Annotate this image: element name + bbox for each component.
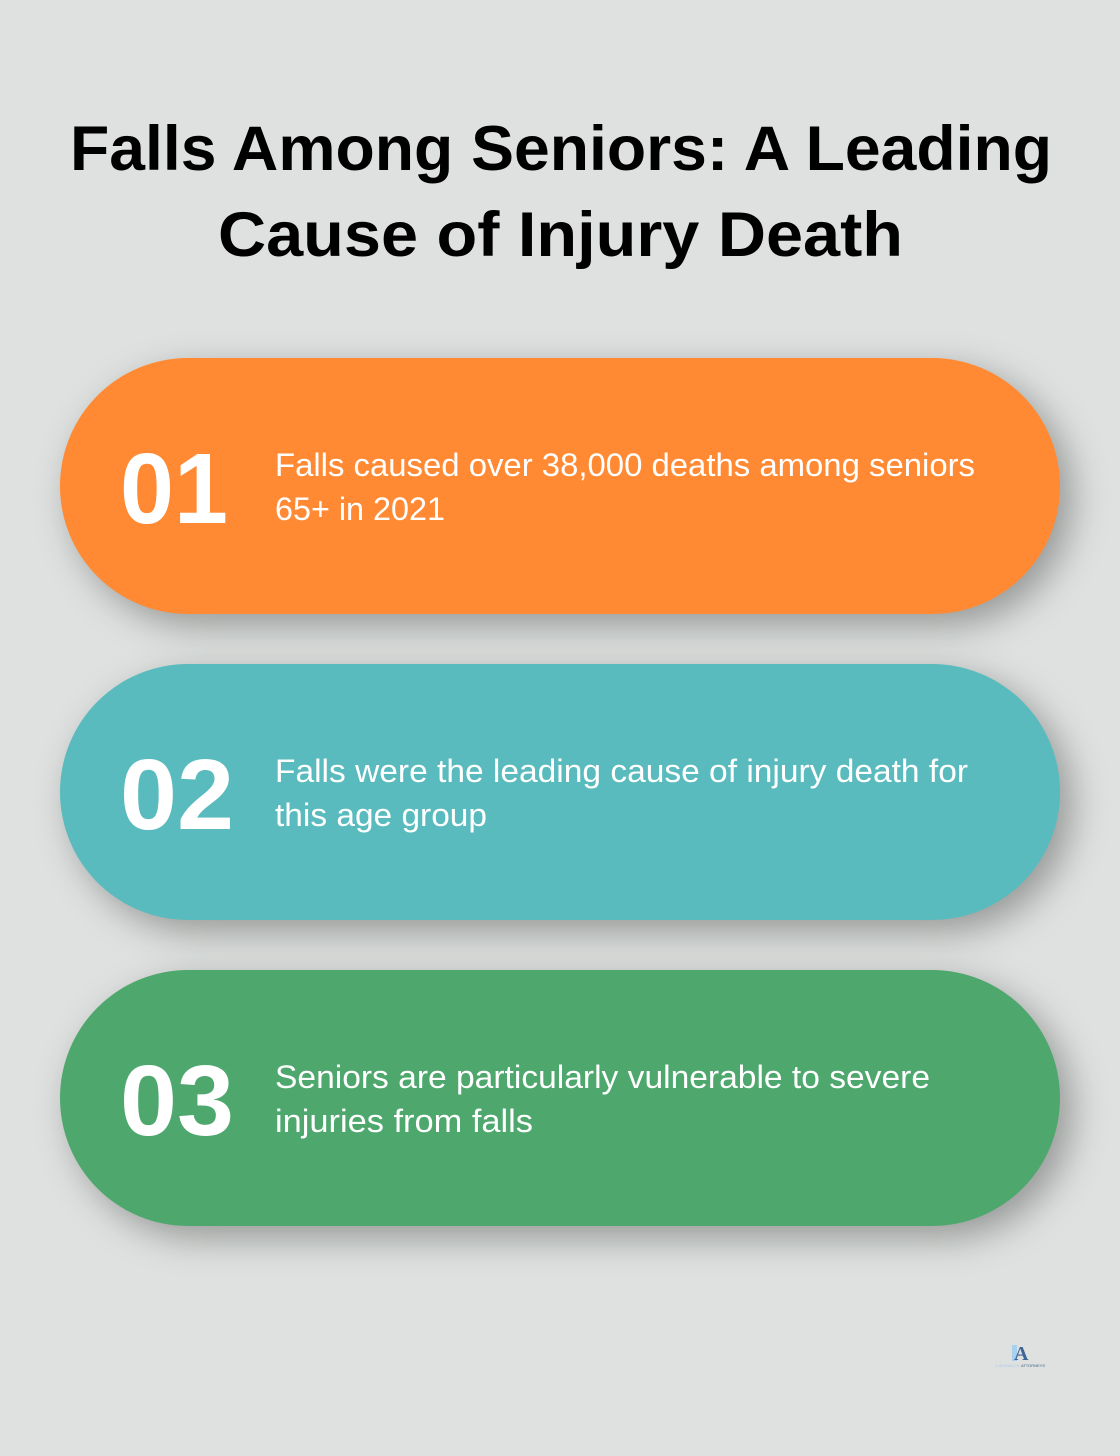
title: Cause of Injury Death bbox=[218, 200, 903, 270]
panel: item 01 bbox=[60, 358, 1072, 626]
title: Falls Among Seniors: A Leading bbox=[70, 114, 1052, 184]
panel: item 03 bbox=[60, 970, 1072, 1238]
text: item 02 bbox=[275, 753, 968, 833]
panel: item 02 bbox=[60, 664, 1072, 932]
text: item 01 bbox=[275, 447, 975, 527]
number 02: 02 bbox=[120, 739, 234, 851]
title bbox=[70, 114, 1052, 270]
number 01: 01 bbox=[120, 433, 228, 545]
number 03: 03 bbox=[120, 1045, 234, 1157]
text: item 03: Seniors are particularly vulnerable to severe bbox=[275, 1059, 930, 1095]
text: item 03 bbox=[275, 1059, 930, 1139]
text: item 01: Falls caused over 38,000 deaths among seniors bbox=[275, 447, 975, 483]
text: item 01: 65+ in 2021 bbox=[275, 491, 445, 527]
text: item 02: this age group bbox=[275, 797, 487, 833]
logo bbox=[996, 1343, 1045, 1368]
text: item 02: Falls were the leading cause of injury death for bbox=[275, 753, 968, 789]
logo: A bbox=[1014, 1343, 1029, 1365]
text: item 03: injuries from falls bbox=[275, 1103, 533, 1139]
logo: ATTORNEYS bbox=[1021, 1363, 1045, 1368]
logo: LEGACY bbox=[996, 1363, 1020, 1368]
